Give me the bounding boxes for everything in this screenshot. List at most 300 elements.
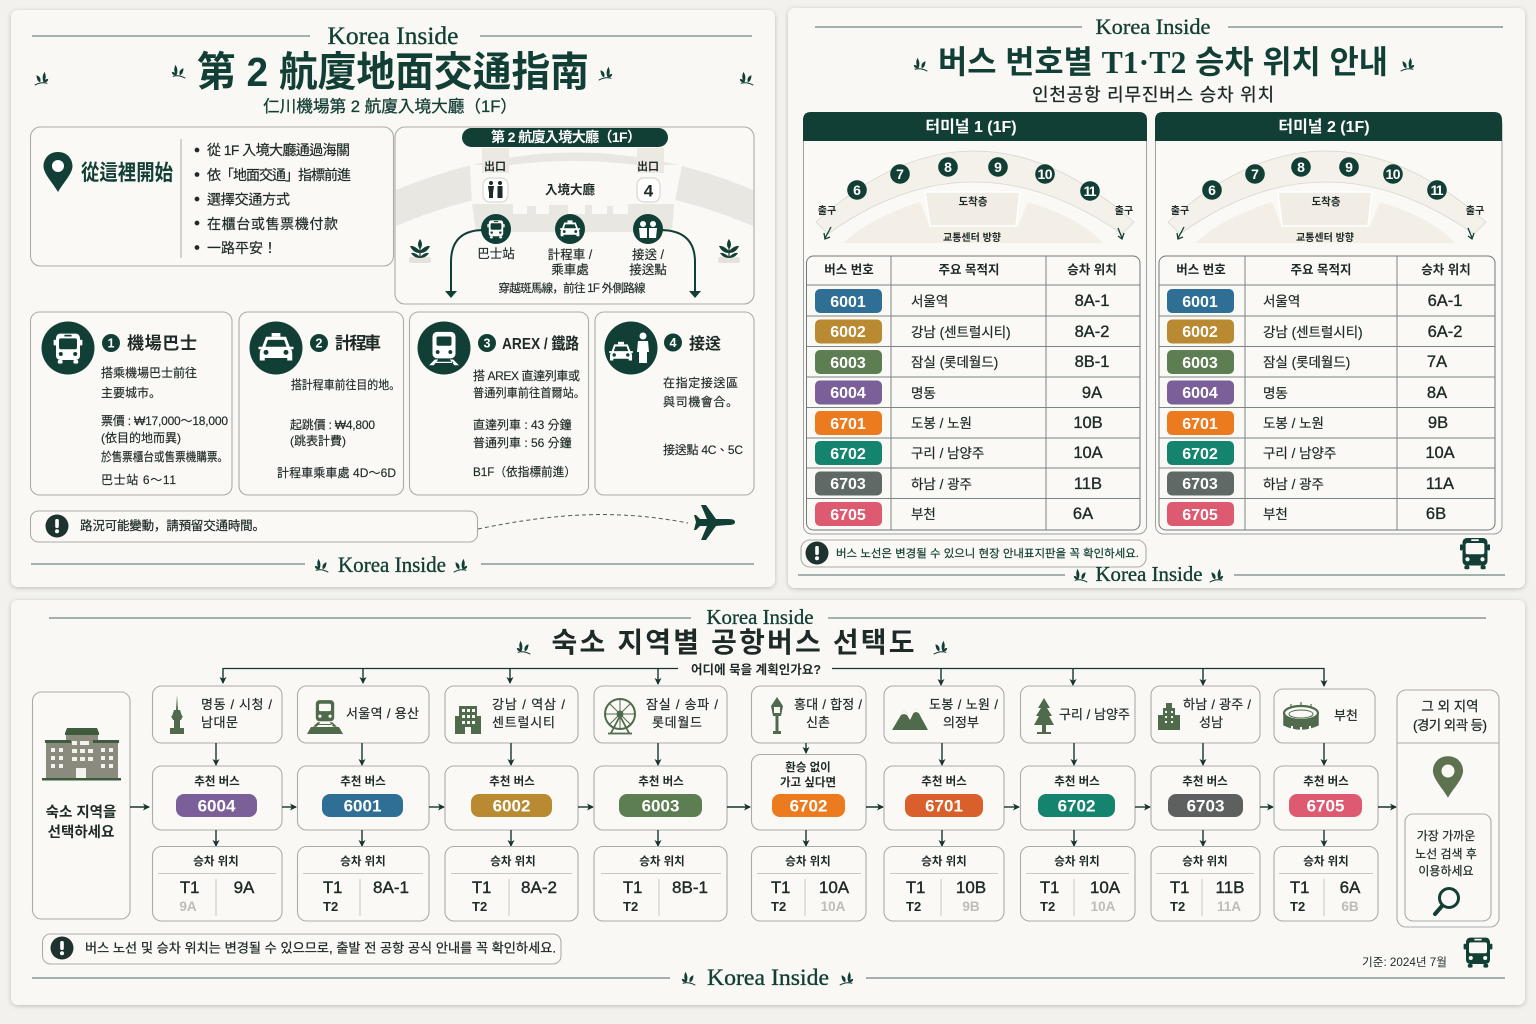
row 6002: 6002 bbox=[1182, 324, 1218, 341]
body text: 起跳價 : ₩4,800 bbox=[290, 418, 375, 432]
area box: 부천 bbox=[1334, 708, 1358, 723]
row 6001: 서울역 bbox=[911, 294, 948, 309]
area box: 의정부 bbox=[943, 715, 979, 730]
terminal 2 header: 터미널 2 (1F) bbox=[1278, 118, 1370, 136]
area box bbox=[884, 686, 1004, 743]
row 6701: 10B bbox=[1073, 414, 1103, 432]
area box: 성남 bbox=[1199, 715, 1223, 730]
recommended bus: 추천 버스 bbox=[638, 774, 684, 788]
panel: bus boarding locations bbox=[788, 8, 1525, 588]
heading: 接送 bbox=[689, 335, 721, 353]
boarding position: 승차 위치 bbox=[921, 855, 967, 868]
body text bbox=[101, 365, 228, 487]
recommended bus: 6001 bbox=[344, 796, 381, 816]
row 6702: 10A bbox=[1425, 444, 1455, 462]
row 6001: 서울역 bbox=[1263, 294, 1300, 309]
row 6001: 6A-1 bbox=[1428, 292, 1462, 310]
gate map: 출구 bbox=[818, 205, 836, 217]
gate 4 marker: 4 bbox=[644, 182, 654, 200]
other areas heading: 그 외 지역 bbox=[1421, 699, 1479, 714]
icon: taxi stand bbox=[555, 214, 585, 244]
gate map bbox=[1168, 151, 1486, 244]
number 2: 2 bbox=[316, 336, 323, 350]
row 6705: 6705 bbox=[1182, 507, 1218, 524]
area box bbox=[1020, 686, 1135, 743]
direct bus bbox=[752, 754, 866, 830]
row 6702: 6702 bbox=[1182, 446, 1218, 463]
start steps list bbox=[195, 142, 351, 256]
icon: train bbox=[418, 322, 470, 374]
recommended bus bbox=[884, 766, 1004, 830]
terminal 2 header bbox=[1155, 112, 1502, 141]
gate map: 7 bbox=[1251, 166, 1259, 182]
recommended bus: 추천 버스 bbox=[921, 774, 967, 788]
column: Jamsil bbox=[594, 686, 727, 921]
recommended bus: 추천 버스 bbox=[340, 774, 386, 788]
icon: location pin bbox=[44, 152, 72, 192]
panel: terminal 1 bbox=[803, 112, 1147, 534]
boarding position: 9B bbox=[962, 899, 980, 914]
boarding position: 6B bbox=[1341, 899, 1359, 914]
boarding position: 승차 위치 bbox=[1182, 855, 1228, 868]
icon: hotel bbox=[42, 728, 121, 780]
boarding position bbox=[752, 846, 866, 921]
callout: traffic warning bbox=[30, 511, 478, 542]
recommended bus: 추천 버스 bbox=[1182, 774, 1228, 788]
row 6002: 8A-2 bbox=[1075, 323, 1109, 341]
row 6702: 6702 bbox=[830, 446, 866, 463]
prompt bbox=[46, 804, 116, 841]
boarding position: T2 bbox=[323, 899, 338, 914]
row 6003: 6003 bbox=[830, 355, 866, 372]
boarding position: 9A bbox=[234, 878, 255, 897]
row 6701: 9B bbox=[1428, 414, 1448, 432]
boarding position: T1 bbox=[1040, 879, 1059, 897]
body text: (依目的地而異) bbox=[101, 430, 181, 445]
body text: 在指定接送區 bbox=[663, 375, 738, 390]
title: 버스 번호별 T1·T2 승차 위치 안내 bbox=[938, 44, 1388, 80]
body text: 直達列車 : 43 分鐘 bbox=[473, 417, 572, 432]
gate map: 도착층 bbox=[1312, 195, 1341, 208]
gate map: 6 bbox=[1208, 182, 1216, 198]
body text: 票價 : ₩17,000～18,000 bbox=[101, 414, 228, 428]
boarding position bbox=[1151, 846, 1260, 921]
start heading: 從這裡開始 bbox=[81, 161, 173, 185]
body text: (跳表計費) bbox=[290, 433, 346, 448]
body text bbox=[277, 377, 400, 480]
gate map: 10 bbox=[1038, 166, 1053, 182]
area box: 구리 / 남양주 bbox=[1059, 707, 1130, 722]
boarding position bbox=[298, 846, 429, 921]
number 4: 4 bbox=[670, 336, 677, 350]
hall stop labels: 接送 / bbox=[632, 247, 664, 262]
direct bus: 환승 없이 bbox=[785, 760, 831, 774]
arrow: dashed flight path bbox=[478, 515, 688, 529]
gate map: 11 bbox=[1430, 182, 1444, 198]
body text bbox=[473, 368, 585, 479]
gate map: 7 bbox=[896, 166, 904, 182]
row 6701 bbox=[815, 411, 1103, 435]
row 6004: 6004 bbox=[830, 385, 866, 402]
gate map: 8 bbox=[944, 159, 952, 175]
footer brand bbox=[798, 562, 1505, 586]
row 6003 bbox=[815, 350, 1109, 374]
row 6703: 11A bbox=[1426, 475, 1454, 493]
area box: 롯데월드 bbox=[652, 715, 702, 730]
boarding position: 11A bbox=[1217, 899, 1241, 914]
number 1: 1 bbox=[108, 336, 115, 350]
row 6703 bbox=[1167, 472, 1454, 496]
number 3 bbox=[478, 334, 496, 352]
row 6002: 6002 bbox=[830, 324, 866, 341]
recommended bus: 6003 bbox=[642, 796, 679, 816]
icon: airplane bbox=[694, 505, 735, 540]
question: 어디에 묵을 계획인가요? bbox=[691, 662, 821, 677]
body text: 普通列車 : 56 分鐘 bbox=[473, 436, 572, 450]
body text: 於售票櫃台或售票機購票。 bbox=[101, 449, 228, 464]
area box: 신촌 bbox=[806, 715, 830, 730]
arrow: start to flow bbox=[130, 806, 149, 808]
start steps list: 選擇交通方式 bbox=[207, 192, 290, 208]
boarding position: T2 bbox=[1040, 899, 1055, 914]
row 6001: 6001 bbox=[1182, 294, 1218, 311]
row 6003: 8B-1 bbox=[1075, 353, 1109, 371]
column: Hongdae bbox=[752, 686, 866, 921]
icon: bus stop bbox=[481, 214, 511, 244]
boarding position: 8B-1 bbox=[672, 878, 708, 897]
recommended bus bbox=[594, 766, 727, 830]
number 1 bbox=[102, 334, 120, 352]
row 6002: 강남 (센트럴시티) bbox=[1263, 325, 1363, 340]
row 6705 bbox=[1167, 502, 1446, 526]
boarding position: T2 bbox=[623, 899, 638, 914]
recommended bus: 추천 버스 bbox=[194, 774, 240, 788]
subtitle: 인천공항 리무진버스 승차 위치 bbox=[1032, 85, 1274, 105]
title: 숙소 지역별 공항버스 선택도 bbox=[552, 627, 914, 658]
start box bbox=[32, 692, 130, 919]
row 6705: 6705 bbox=[830, 507, 866, 524]
boarding position: 10A bbox=[821, 899, 846, 914]
area box bbox=[594, 686, 727, 743]
terminal 1 header: 터미널 1 (1F) bbox=[925, 118, 1017, 136]
exit labels: 出口 bbox=[637, 160, 659, 173]
boarding position: T2 bbox=[771, 899, 786, 914]
row 6701 bbox=[1167, 411, 1448, 435]
terminal 1 header bbox=[803, 112, 1147, 141]
decorative leaves bbox=[517, 641, 947, 654]
icon: bus bbox=[1460, 538, 1490, 569]
row 6004 bbox=[815, 380, 1102, 404]
gate map: 8 bbox=[1297, 159, 1305, 175]
boarding position bbox=[152, 846, 282, 921]
boarding position: 승차 위치 bbox=[193, 855, 239, 868]
advice box: 가장 가까운 bbox=[1417, 829, 1475, 843]
gate map bbox=[816, 151, 1134, 244]
boarding position: T1 bbox=[323, 879, 342, 897]
recommended bus bbox=[1274, 766, 1378, 830]
icon: warning bbox=[46, 514, 68, 538]
row 6705: 6B bbox=[1426, 505, 1446, 523]
boarding position: T2 bbox=[1290, 899, 1305, 914]
row 6703: 6703 bbox=[1182, 476, 1218, 493]
direct bus: 가고 싶다면 bbox=[780, 775, 836, 789]
footer brand: Korea Inside bbox=[1096, 562, 1202, 586]
column: Myeongdong bbox=[152, 686, 282, 921]
row 6004: 8A bbox=[1427, 384, 1447, 402]
icon: bus bbox=[1464, 938, 1492, 968]
gate map: 11 bbox=[1084, 183, 1097, 199]
recommended bus: 6002 bbox=[493, 796, 530, 816]
boarding position: 승차 위치 bbox=[785, 855, 831, 868]
row 6004: 명동 bbox=[911, 386, 936, 401]
recommended bus: 6705 bbox=[1307, 796, 1344, 816]
area box: 잠실 / 송파 / bbox=[646, 697, 718, 712]
recommended bus: 6004 bbox=[198, 796, 236, 816]
number 2 bbox=[310, 334, 328, 352]
area box bbox=[298, 686, 429, 743]
terminal 1 table bbox=[806, 256, 1140, 530]
gate map: 교통센터 방향 bbox=[1296, 231, 1354, 244]
terminal 2 table: 버스 번호 bbox=[1176, 263, 1226, 277]
card: taxi bbox=[239, 312, 404, 495]
column: Gangnam bbox=[445, 686, 578, 921]
boarding position: T1 bbox=[623, 879, 642, 897]
gate map: 9 bbox=[994, 159, 1002, 175]
branch arrows bbox=[223, 668, 1324, 686]
recommended bus bbox=[152, 766, 282, 830]
row 6003: 7A bbox=[1427, 353, 1447, 371]
icon: taxi bbox=[250, 322, 302, 374]
row 6002: 6A-2 bbox=[1428, 323, 1462, 341]
body text: 巴士站 6～11 bbox=[101, 473, 176, 487]
date note: 기준: 2024년 7월 bbox=[1362, 956, 1447, 969]
footer brand bbox=[32, 965, 1505, 990]
row 6701: 도봉 / 노원 bbox=[1263, 416, 1324, 431]
title: 第 2 航廈地面交通指南 bbox=[197, 49, 589, 95]
card: airport bus bbox=[30, 312, 232, 495]
row 6003: 잠실 (롯데월드) bbox=[1263, 355, 1350, 370]
icon: warning bbox=[50, 936, 74, 960]
row 6701: 6701 bbox=[830, 416, 866, 433]
panel: arrivals hall map bbox=[395, 127, 754, 304]
area box: 하남 / 광주 / bbox=[1183, 697, 1251, 712]
hall header pill bbox=[462, 128, 668, 147]
body text: 接送點 4C、5C bbox=[663, 442, 743, 457]
row 6703: 하남 / 광주 bbox=[911, 477, 972, 492]
start steps list: 一路平安！ bbox=[207, 240, 277, 256]
crosswalk note: 穿越斑馬線，前往 1F 外側路線 bbox=[498, 281, 646, 295]
area box bbox=[152, 686, 282, 743]
boarding position bbox=[1020, 846, 1135, 921]
exit labels: 出口 bbox=[484, 160, 506, 173]
header brand: Korea Inside bbox=[328, 23, 458, 50]
row 6004: 명동 bbox=[1263, 386, 1288, 401]
boarding position: 6A bbox=[1340, 878, 1361, 897]
row 6003: 6003 bbox=[1182, 355, 1218, 372]
recommended bus bbox=[445, 766, 578, 830]
footer brand: Korea Inside bbox=[707, 965, 829, 990]
boarding position: 승차 위치 bbox=[639, 855, 685, 868]
area box: 남대문 bbox=[201, 715, 238, 730]
boarding position: T2 bbox=[1170, 899, 1185, 914]
gate map: 도착층 bbox=[959, 195, 988, 208]
row 6001: 8A-1 bbox=[1075, 292, 1109, 310]
boarding position: 10B bbox=[956, 878, 986, 897]
icon: location pin bbox=[1433, 756, 1463, 798]
boarding position: T1 bbox=[771, 879, 790, 897]
gate map: 출구 bbox=[1115, 205, 1133, 217]
boarding position: 승차 위치 bbox=[1054, 855, 1100, 868]
boarding position: 9A bbox=[179, 899, 197, 914]
body text: 與司機會合。 bbox=[663, 395, 738, 409]
icon: car and person bbox=[604, 322, 658, 374]
row 6703: 6703 bbox=[830, 476, 866, 493]
area box bbox=[1274, 689, 1375, 743]
row 6701: 6701 bbox=[1182, 416, 1218, 433]
icons: plants bbox=[409, 239, 740, 263]
recommended bus: 추천 버스 bbox=[1303, 774, 1349, 788]
panel: terminal 2 bbox=[1155, 112, 1502, 534]
boarding position: 8A-1 bbox=[373, 878, 409, 897]
start steps list: 依「地面交通」指標前進 bbox=[207, 167, 351, 183]
boarding position: T2 bbox=[906, 899, 921, 914]
row 6705 bbox=[815, 502, 1093, 526]
gate 4 marker bbox=[637, 178, 660, 202]
row 6705: 6A bbox=[1073, 505, 1093, 523]
row 6002: 강남 (센트럴시티) bbox=[911, 325, 1011, 340]
row 6001: 6001 bbox=[830, 294, 866, 311]
body text: 普通列車前往首爾站。 bbox=[473, 385, 585, 400]
recommended bus: 추천 버스 bbox=[1054, 774, 1100, 788]
icon: magnifier bbox=[1435, 888, 1458, 914]
subtitle: 仁川機場第 2 航廈入境大廳（1F） bbox=[263, 97, 517, 116]
other areas heading: (경기 외곽 등) bbox=[1413, 718, 1487, 733]
arrow: right route bbox=[662, 230, 695, 296]
recommended bus: 추천 버스 bbox=[489, 774, 535, 788]
area box: 홍대 / 합정 / bbox=[794, 697, 862, 712]
gate map: 6 bbox=[853, 182, 861, 198]
row 6703: 하남 / 광주 bbox=[1263, 477, 1324, 492]
recommended bus bbox=[298, 766, 429, 830]
number 3: 3 bbox=[484, 336, 491, 350]
row 6701: 도봉 / 노원 bbox=[911, 416, 972, 431]
boarding position: T2 bbox=[472, 899, 487, 914]
callout: change warning: 버스 노선 및 승차 위치는 변경될 수 있으므로, 출발 전 공항 공식 안내를 꼭 확인하세요. bbox=[85, 940, 556, 956]
boarding position: 10A bbox=[819, 878, 850, 897]
body text: 主要城市。 bbox=[101, 386, 161, 400]
area box: 서울역 / 용산 bbox=[346, 706, 419, 721]
boarding position: T1 bbox=[180, 879, 199, 897]
icon: warning bbox=[806, 542, 828, 564]
row 6002 bbox=[1167, 320, 1462, 344]
boarding position: 11B bbox=[1216, 878, 1244, 897]
boarding position: 승차 위치 bbox=[490, 855, 536, 868]
hall stop labels: 計程車 / bbox=[548, 247, 593, 262]
row 6702: 10A bbox=[1073, 444, 1103, 462]
row 6004 bbox=[1167, 380, 1447, 404]
body text: 搭 AREX 直達列車或 bbox=[473, 368, 580, 383]
exit labels bbox=[484, 160, 659, 173]
area box bbox=[752, 686, 866, 743]
column: Hanam bbox=[1151, 686, 1260, 921]
area box bbox=[445, 686, 578, 743]
icon: bus bbox=[42, 322, 94, 374]
terminal 1 table: 승차 위치 bbox=[1067, 263, 1117, 277]
start steps list: 在櫃台或售票機付款 bbox=[207, 216, 338, 232]
row 6703: 11B bbox=[1074, 475, 1102, 493]
area box: 센트럴시티 bbox=[492, 715, 555, 730]
area box bbox=[1151, 686, 1260, 743]
header brand: Korea Inside bbox=[706, 605, 814, 629]
row 6003 bbox=[1167, 350, 1447, 374]
recommended bus: 6702 bbox=[1058, 796, 1095, 816]
callout: change warning bbox=[42, 934, 561, 964]
terminal 2 table: 승차 위치 bbox=[1421, 263, 1471, 277]
boarding position: 8A-2 bbox=[521, 878, 557, 897]
decorative leaves bbox=[914, 58, 1414, 71]
terminal 1 table: 버스 번호 bbox=[824, 263, 874, 277]
row 6003: 잠실 (롯데월드) bbox=[911, 355, 998, 370]
body text bbox=[663, 375, 743, 457]
panel: lodging area bus selector bbox=[11, 600, 1525, 1005]
boarding position: 승차 위치 bbox=[340, 855, 386, 868]
terminal 2 table: 주요 목적지 bbox=[1291, 263, 1351, 277]
icon: restroom bbox=[483, 178, 508, 202]
panel: start here bbox=[30, 127, 394, 266]
body text: 搭計程車前往目的地。 bbox=[291, 377, 400, 392]
heading: 計程車 bbox=[335, 334, 381, 353]
panel: terminal 2 ground transport guide bbox=[11, 10, 775, 587]
direct bus: 6702 bbox=[790, 796, 827, 816]
boarding position: T1 bbox=[1290, 879, 1309, 897]
prompt: 선택하세요 bbox=[48, 824, 114, 841]
body text: B1F（依指標前進） bbox=[473, 464, 576, 479]
gate map: 출구 bbox=[1466, 205, 1484, 217]
advice box: 이용하세요 bbox=[1418, 864, 1474, 878]
boarding position bbox=[884, 846, 1004, 921]
icon: pickup bbox=[633, 214, 663, 244]
boarding position bbox=[445, 846, 578, 921]
hall label: 入境大廳 bbox=[545, 182, 595, 197]
boarding position: 승차 위치 bbox=[1303, 855, 1349, 868]
row 6001 bbox=[1167, 289, 1462, 313]
row 6001 bbox=[815, 289, 1109, 313]
row 6703 bbox=[815, 472, 1102, 496]
recommended bus bbox=[1020, 766, 1135, 830]
area box: 강남 / 역삼 / bbox=[492, 697, 565, 712]
row 6702 bbox=[815, 441, 1103, 465]
area box: 도봉 / 노원 / bbox=[929, 697, 998, 712]
callout: route change warning bbox=[801, 540, 1146, 567]
hall stop labels: 巴士站 bbox=[477, 247, 515, 261]
boarding position: 10A bbox=[1090, 878, 1121, 897]
hall stop labels: 乘車處 bbox=[551, 263, 589, 277]
recommended bus bbox=[1151, 766, 1260, 830]
area box: 명동 / 시청 / bbox=[201, 697, 272, 712]
heading: 機場巴士 bbox=[127, 334, 197, 353]
arrow: left route bbox=[451, 230, 482, 296]
boarding position: T1 bbox=[1170, 879, 1189, 897]
row 6002 bbox=[815, 320, 1109, 344]
recommended bus: 6703 bbox=[1187, 796, 1224, 816]
gate map: 교통센터 방향 bbox=[943, 231, 1001, 244]
header brand: Korea Inside bbox=[1096, 14, 1210, 39]
gate map: 출구 bbox=[1171, 205, 1189, 217]
gate map: 10 bbox=[1386, 166, 1401, 182]
callout: route change warning: 버스 노선은 변경될 수 있으니 현장 안내표지판을 꼭 확인하세요. bbox=[836, 546, 1139, 560]
row 6705: 부천 bbox=[911, 507, 936, 522]
other areas heading bbox=[1413, 699, 1487, 733]
